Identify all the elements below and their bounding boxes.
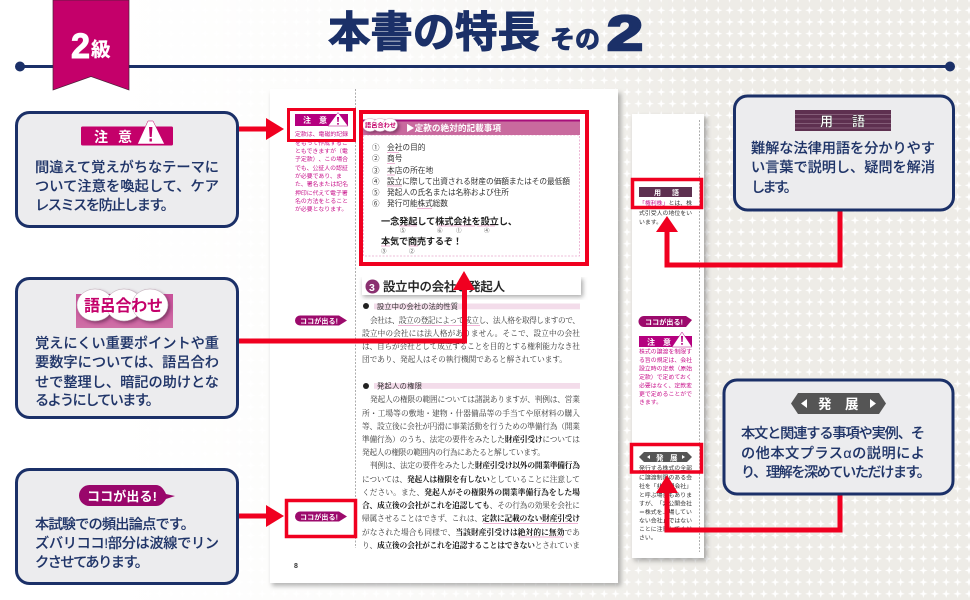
sidebar: caution note: 定款は、電磁的記録 bbox=[295, 130, 348, 138]
mnemonic panel bbox=[362, 118, 580, 256]
strip: development note: すが、「非公開会社 bbox=[639, 500, 692, 508]
callout: mnemonic: せで整理し、暗記の助けとな bbox=[35, 375, 219, 391]
mnemonic panel: 本店の所在地 bbox=[387, 165, 433, 175]
caution badge: 注 意 bbox=[94, 129, 132, 145]
mnemonic panel: ② bbox=[409, 247, 415, 255]
body section 2 bbox=[362, 382, 580, 550]
strip: term label: 式引受人の地位をい bbox=[639, 209, 692, 217]
strip: development note: さい。 bbox=[639, 534, 657, 542]
callout: term: 難解な法律用語を分かりやす bbox=[751, 140, 935, 157]
mnemonic panel: ① bbox=[372, 143, 380, 152]
callout: term: い言葉で説明し、疑問を解消 bbox=[751, 159, 935, 176]
sidebar tag: second bbox=[295, 512, 347, 522]
strip: caution note: 注 意 bbox=[647, 337, 671, 347]
sidebar: caution note: ともできますが（電 bbox=[295, 147, 348, 155]
strip: term label bbox=[639, 187, 692, 226]
callout: exam point: 本試験での頻出論点です。 bbox=[35, 517, 195, 533]
sidebar: caution note: が必要となります。 bbox=[295, 205, 347, 213]
section heading: 設立中の会社と発起人 bbox=[383, 279, 506, 294]
mnemonic panel: 設立に際して出資される財産の価額またはその最低額 bbox=[387, 176, 570, 186]
mnemonic panel: 一念発起して株式会社を設立し、 bbox=[381, 216, 517, 226]
callout: mnemonic bbox=[16, 278, 238, 418]
mnemonic panel: ⑤ bbox=[400, 226, 406, 234]
callout: exam point bbox=[16, 470, 238, 584]
body section 2: については、発起人は権限を有しないとしていることに注意して bbox=[362, 474, 580, 484]
strip: development note: に譲渡制限のある会 bbox=[639, 474, 692, 482]
caution badge bbox=[81, 121, 173, 146]
callout: term: します。 bbox=[751, 180, 798, 196]
mnemonic panel: 発起人の氏名または名称および住所 bbox=[387, 187, 509, 197]
grade ribbon bbox=[53, 0, 129, 90]
development badge bbox=[791, 393, 886, 414]
title bbox=[328, 7, 643, 61]
highlight frames bbox=[286, 110, 702, 536]
strip: development note: ＝株式を上場してい bbox=[639, 508, 692, 516]
body section 1: は、自らが会社として成立することを目的とする権利能力なき社 bbox=[362, 341, 580, 351]
strip: term label: います。 bbox=[639, 219, 662, 226]
mnemonic panel: 発行可能株式総数 bbox=[387, 198, 448, 208]
sidebar: caution note: が必要であり、ま bbox=[295, 172, 342, 180]
strip: development note: ことに注意してくだ bbox=[639, 525, 692, 533]
callout: mnemonic: 要数字については、語呂合わ bbox=[35, 355, 219, 371]
callout: mnemonic: 覚えにくい重要ポイントや重 bbox=[35, 336, 219, 352]
development badge: 発 bbox=[818, 397, 832, 412]
mnemonic panel: 本気で商売するぞ！ bbox=[381, 236, 462, 246]
callout: development: 本文と関連する事項や実例、そ bbox=[741, 425, 925, 442]
body section 1: 会社は、設立の登記によって成立し、法人格を取得しますので、 bbox=[370, 315, 580, 325]
body section 1: 設立中の会社には法人格がありません。そこで、設立中の会社 bbox=[362, 328, 580, 338]
body section 2: 所・工場等の敷地・建物・什器備品等の手当てや原材料の購入 bbox=[362, 408, 580, 418]
strip: term label: 「権利株」とは、株 bbox=[639, 199, 692, 207]
strip: development note: と呼ぶ場合もありま bbox=[639, 491, 692, 499]
mnemonic panel: ▶定款の絶対的記載事項 bbox=[406, 122, 501, 133]
mnemonic badge: 語呂合わせ bbox=[84, 297, 163, 315]
strip: development note: 展 bbox=[670, 454, 678, 462]
strip: exam tag: ココが出る! bbox=[645, 318, 683, 326]
body section 2: 発起人の権限 bbox=[377, 382, 422, 390]
header rule bbox=[15, 62, 955, 72]
sidebar: caution note: をもって作成するこ bbox=[295, 139, 348, 147]
mnemonic panel: ⑥ bbox=[372, 199, 380, 208]
body section 1: 団であり、発起人はその執行機関であると解されています。 bbox=[362, 354, 567, 364]
strip: caution note: 株式の譲渡を制限す bbox=[639, 348, 692, 356]
body section 2: がなされた場合も同様で、当該財産引受けは絶対的に無効であ bbox=[362, 527, 580, 537]
section heading bbox=[362, 277, 583, 297]
development badge: 展 bbox=[845, 397, 859, 412]
sidebar tag: second: ココが出る! bbox=[300, 512, 338, 522]
sidebar: caution note: 注 意 bbox=[303, 115, 327, 125]
body section 1 bbox=[362, 302, 580, 364]
strip: development note: 発行する株式の全部 bbox=[639, 464, 692, 472]
mnemonic panel: ⑤ bbox=[372, 188, 380, 197]
callout: exam point: クさせてあります。 bbox=[35, 555, 149, 571]
body section 2: ください。また、発起人がその権限外の開業準備行為をした場 bbox=[362, 487, 580, 497]
strip: term label: 用 bbox=[654, 189, 661, 197]
arrow: mnemonic bbox=[238, 271, 475, 341]
exam badge bbox=[79, 485, 175, 506]
arrow: development bbox=[656, 475, 840, 530]
body section 2: 合、成立後の会社がこれを追認しても、その行為の効果を会社に bbox=[362, 500, 580, 510]
arrow: caution bbox=[238, 118, 284, 140]
mnemonic panel: 商号 bbox=[387, 153, 403, 163]
title: 2 bbox=[607, 7, 643, 61]
page number: 8 bbox=[294, 563, 298, 570]
strip: caution note: る旨の規定は、会社 bbox=[639, 356, 692, 364]
callout: caution bbox=[16, 112, 238, 226]
strip: caution note: 必要はなく、定款変 bbox=[639, 382, 692, 390]
callout: caution: 間違えて覚えがちなテーマに bbox=[35, 159, 219, 176]
mnemonic panel: ④ bbox=[484, 226, 490, 234]
body section 2: 発起人の権限の範囲については諸説ありますが、判例は、営業 bbox=[370, 394, 580, 404]
strip: exam tag bbox=[638, 316, 692, 327]
strip: development note: ない会社」ではない bbox=[639, 516, 692, 524]
body section 2: り、成立後の会社がこれを追認することはできないとされていま bbox=[362, 540, 580, 550]
mnemonic panel: ③ bbox=[372, 166, 380, 175]
exam badge: ココが出る! bbox=[87, 489, 157, 504]
title: 本書の特長 bbox=[328, 10, 540, 57]
mnemonic panel: ① bbox=[456, 226, 462, 234]
body section 2: 等、設立後に会社が円滑に事業活動を行うための準備行為（開業 bbox=[362, 421, 580, 431]
grade ribbon: 級 bbox=[91, 39, 111, 61]
strip: caution note: 更で定めることがで bbox=[639, 390, 692, 398]
strip: development note bbox=[639, 452, 692, 542]
mnemonic panel: ② bbox=[372, 154, 380, 163]
strip: development note: 社を「非公開会社」 bbox=[639, 482, 692, 490]
mnemonic panel: 会社の目的 bbox=[387, 142, 426, 152]
sidebar: caution note: 名の方法をとること bbox=[295, 197, 348, 205]
body section 2: 準備行為）のうち、法定の要件をみたした財産引受けについては bbox=[362, 434, 580, 444]
body section 2: 発起人の権限の範囲内の行為にあたると解しています。 bbox=[362, 447, 545, 457]
sidebar: caution note: でも、公証人の認証 bbox=[295, 165, 348, 172]
term badge: 用 bbox=[820, 114, 833, 129]
callout: caution: レスミスを防止します。 bbox=[35, 198, 175, 214]
arrow: exam point bbox=[238, 505, 284, 527]
mnemonic panel: 語呂合わせ bbox=[365, 122, 396, 130]
sidebar: caution note: 押印に代えて電子署 bbox=[295, 189, 348, 197]
mnemonic panel: ⑥ bbox=[437, 226, 443, 234]
margin strip bbox=[632, 114, 707, 561]
term badge: 語 bbox=[852, 114, 865, 129]
callout: term bbox=[734, 96, 954, 210]
mnemonic badge bbox=[76, 289, 173, 328]
body section 2: 判例は、法定の要件をみたした財産引受け以外の開業準備行為 bbox=[370, 460, 580, 470]
callout: caution: ついて注意を喚起して、ケア bbox=[35, 178, 219, 195]
arrow: term bbox=[656, 209, 840, 265]
callout: development bbox=[724, 380, 953, 494]
body section 1: 設立中の会社の法的性質 bbox=[377, 302, 458, 311]
term badge bbox=[795, 110, 891, 131]
strip: caution note: 定款）で定めておく bbox=[639, 373, 692, 381]
sidebar: caution note: た、署名または記名 bbox=[295, 180, 348, 188]
body section 2: 帰属させることはできず、これは、定款に記載のない財産引受け bbox=[362, 513, 580, 523]
mnemonic panel: ③ bbox=[381, 247, 387, 255]
grade ribbon: 2 bbox=[71, 27, 90, 66]
strip: development note: 発 bbox=[656, 452, 664, 462]
sidebar: caution note: 子定款）、この場合 bbox=[295, 155, 348, 163]
strip: term label: 語 bbox=[672, 189, 679, 197]
sidebar tag: first: ココが出る! bbox=[300, 316, 338, 326]
strip: caution note bbox=[639, 332, 692, 406]
mnemonic panel: ④ bbox=[372, 177, 380, 186]
callout: development: り、理解を深めていただけます。 bbox=[741, 464, 931, 481]
page mockup bbox=[270, 89, 621, 586]
callout: exam point: ズバリココ!部分は波線でリン bbox=[35, 535, 219, 552]
title: その bbox=[550, 26, 600, 54]
sidebar: caution note bbox=[295, 112, 348, 213]
sidebar tag: first bbox=[295, 316, 347, 326]
callout: development: の他本文プラスαの説明によ bbox=[741, 446, 925, 462]
strip: caution note: きます。 bbox=[639, 399, 662, 406]
section heading: 3 bbox=[369, 282, 375, 294]
strip: caution note: 設立時の定款（原始 bbox=[639, 364, 692, 372]
callout: mnemonic: るようにしています。 bbox=[35, 393, 160, 409]
